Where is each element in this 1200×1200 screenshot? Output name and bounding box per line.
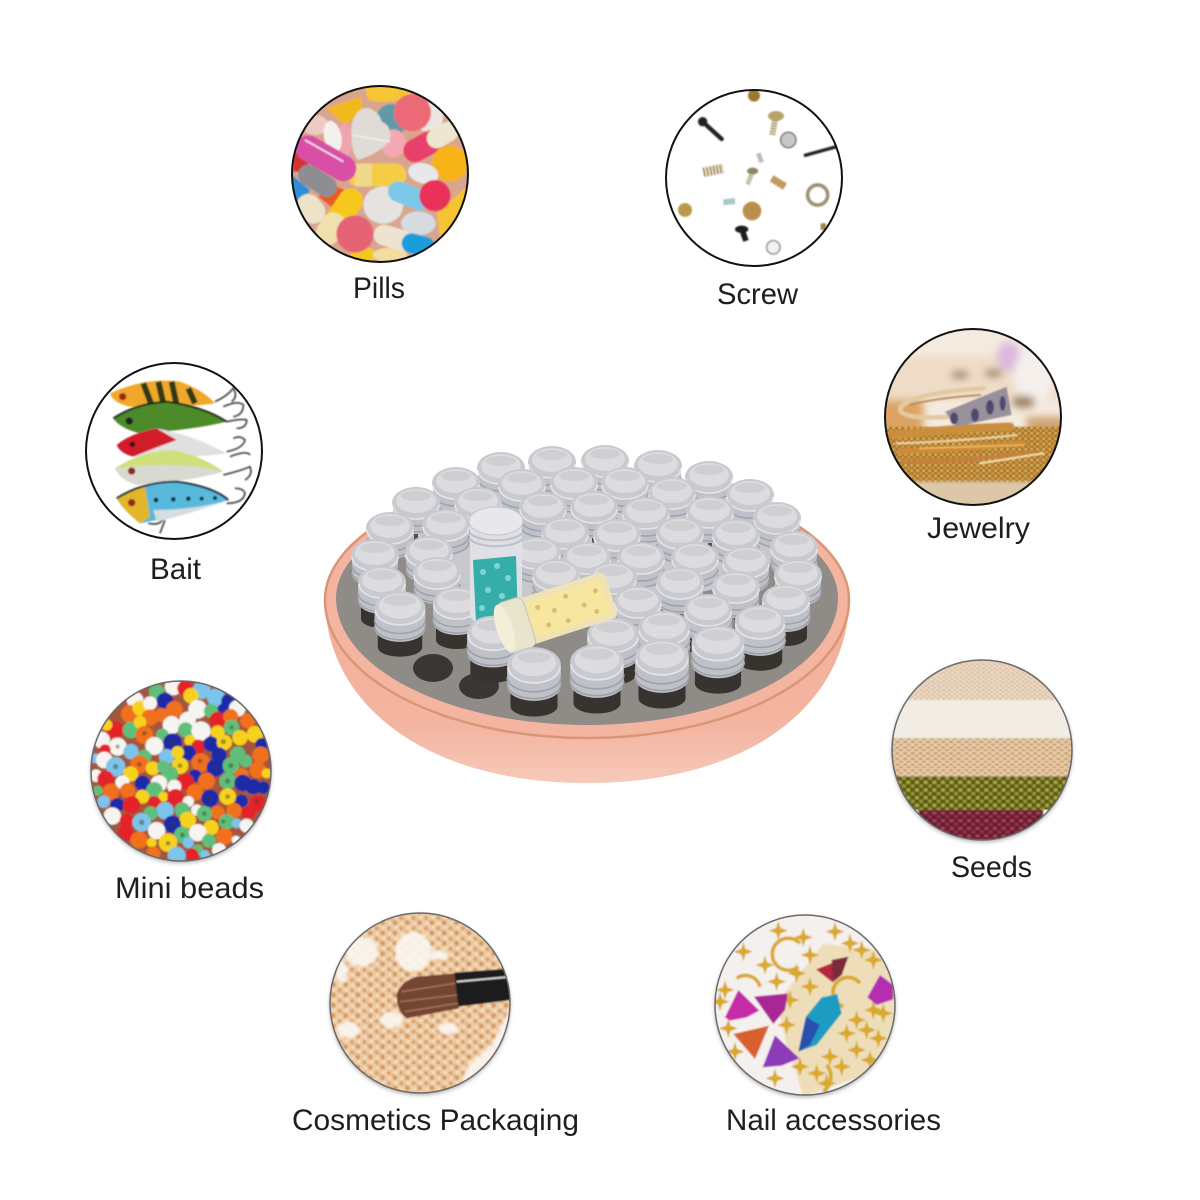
tall vial with teal beads xyxy=(469,507,523,622)
shadow xyxy=(330,915,510,1095)
label: Jewelry: Jewelry xyxy=(927,512,1030,545)
product: round case with vials xyxy=(325,445,849,783)
case body xyxy=(325,598,849,783)
label: Nail accessories: Nail accessories xyxy=(726,1104,941,1137)
label: Seeds: Seeds xyxy=(951,851,1032,884)
panel: cosmetics packaging xyxy=(292,905,579,1137)
front vials xyxy=(507,639,689,717)
pale area behind back vials xyxy=(400,487,780,603)
label: Cosmetics Packaqing: Cosmetics Packaqing xyxy=(292,1104,579,1137)
foam insert xyxy=(336,486,838,725)
shadow xyxy=(715,917,895,1097)
shadow xyxy=(91,683,271,863)
panel: seeds xyxy=(890,659,1074,878)
case rim with zipper xyxy=(325,475,849,738)
panel: nail accessories xyxy=(710,910,941,1137)
vial with yellow beads on its side xyxy=(489,569,619,656)
icon: powder and brush photo xyxy=(330,914,510,1092)
label: Screw: Screw xyxy=(717,278,798,311)
shadow xyxy=(892,662,1072,842)
panel: pills xyxy=(291,85,469,298)
icon: colourful beads photo xyxy=(92,682,270,860)
icon: layered seeds photo xyxy=(892,660,1072,840)
panel: jewelry xyxy=(884,328,1062,544)
icon: gold rings photo xyxy=(886,330,1060,504)
icon: pills photo xyxy=(293,87,467,261)
foam holes xyxy=(413,654,499,699)
icon: nail gems and gold stars photo xyxy=(716,916,894,1094)
label: Bait: Bait xyxy=(150,553,202,586)
panel: bait xyxy=(86,363,262,586)
infographic canvas xyxy=(85,85,1074,1136)
icon: screws photo xyxy=(678,90,837,254)
label: Pills: Pills xyxy=(353,272,405,305)
panel: mini beads xyxy=(88,680,274,898)
icon: fishing lures photo xyxy=(110,381,251,533)
label: Mini beads: Mini beads xyxy=(115,872,264,905)
back vials xyxy=(351,445,822,671)
panel: screw xyxy=(666,90,842,311)
middle vials xyxy=(467,611,744,694)
